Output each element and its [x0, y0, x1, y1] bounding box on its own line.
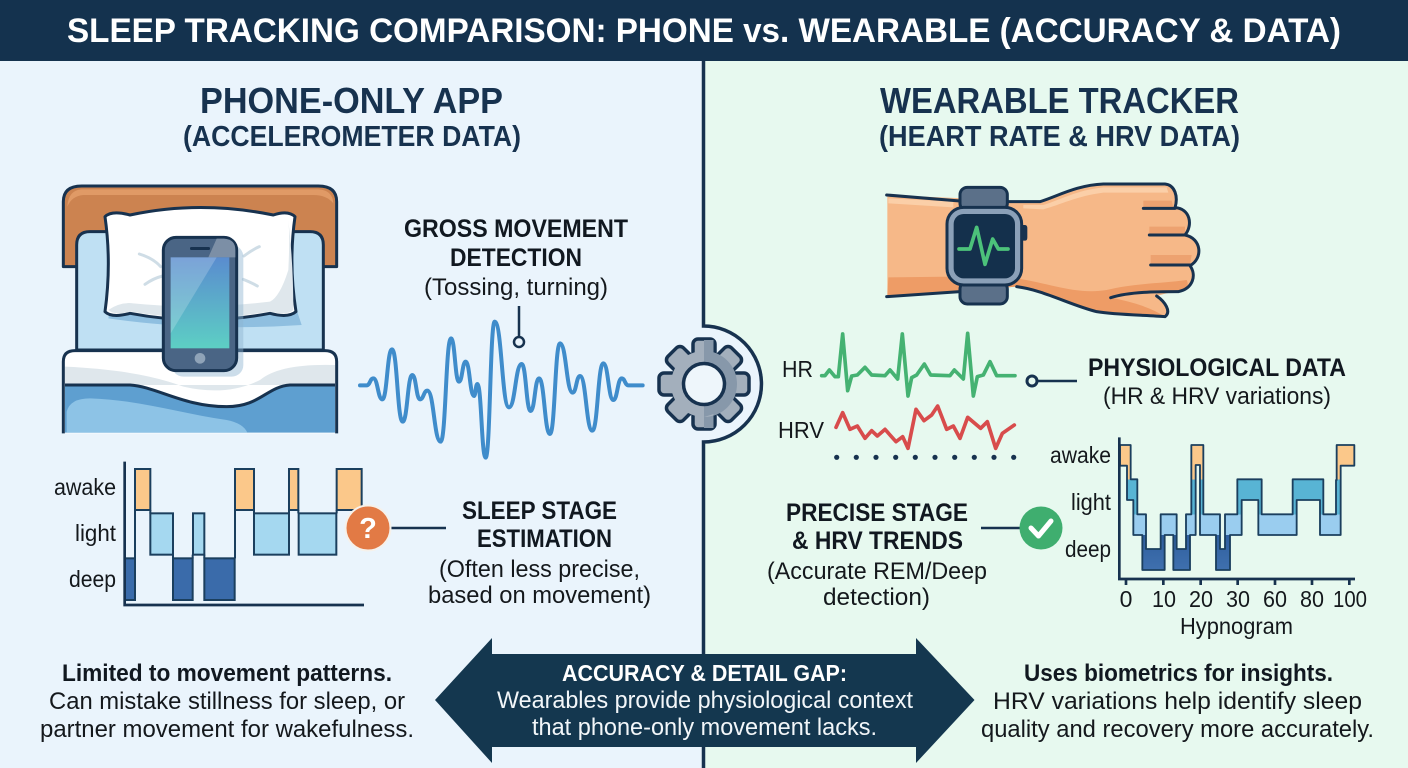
chart: accelerometer waveform: [360, 322, 643, 458]
chart: HR and HRV signals: [778, 333, 1016, 460]
heading: phone-only app: [183, 80, 521, 153]
callout: sleep stage estimation: (Often less precise,: [439, 556, 640, 583]
panel: wearable tracker: [767, 80, 1374, 743]
text block: wearable benefit: quality and recovery more accurately.: [981, 716, 1374, 743]
callout: gross movement detection: [404, 215, 628, 301]
icon: wrist with smartwatch: [887, 184, 1199, 317]
icon: center gear: [659, 339, 749, 429]
callout: sleep stage estimation: [428, 497, 651, 609]
callout: precise stage and HRV trends: & HRV TRENDS: [792, 527, 963, 555]
heading: wearable tracker: (HEART RATE & HRV DATA): [879, 121, 1240, 153]
label: HR: HR: [782, 356, 813, 382]
callout: physiological data: PHYSIOLOGICAL DATA: [1088, 354, 1346, 382]
text block: phone limitation: Can mistake stillness for sleep, or: [49, 688, 405, 715]
panel: phone-only app: [40, 80, 651, 743]
icon: check mark badge: [981, 506, 1062, 550]
line: HR trace: [822, 333, 1015, 396]
callout arrow: accuracy and detail gap: [435, 638, 974, 763]
label: HRV: HRV: [778, 417, 825, 443]
panel background: wearable side: [704, 61, 1408, 768]
leader line: physiological data: [1027, 376, 1077, 386]
callout: sleep stage estimation: SLEEP STAGE: [462, 497, 617, 525]
callout arrow: accuracy and detail gap: ACCURACY & DETAIL GAP:: [562, 660, 847, 686]
callout: gross movement detection: DETECTION: [450, 244, 582, 272]
dots: time axis: [834, 455, 1016, 460]
text block: wearable benefit: [981, 660, 1374, 743]
icon: question mark badge: [346, 506, 446, 550]
title banner: SLEEP TRACKING COMPARISON: PHONE vs. WEARABLE (ACCURACY & DATA): [67, 12, 1341, 50]
step bars: [125, 462, 364, 605]
axis tick labels: [1120, 586, 1367, 612]
callout: precise stage and HRV trends: [767, 499, 987, 611]
text block: wearable benefit: Uses biometrics for insights.: [1024, 660, 1333, 687]
axis tick labels: 80: [1300, 586, 1324, 612]
text block: wearable benefit: HRV variations help identify sleep: [993, 688, 1362, 715]
axis tick labels: 20: [1189, 586, 1213, 612]
callout: physiological data: [1088, 354, 1346, 410]
chart: phone sleep stages: [54, 462, 364, 605]
panel background: phone side: [0, 61, 704, 768]
icon: phone on bed: [63, 186, 337, 433]
line: HRV trace: [836, 406, 1014, 448]
axis tick labels: 10: [1152, 586, 1176, 612]
text block: phone limitation: [40, 660, 414, 743]
center divider: [704, 61, 761, 768]
heading: wearable tracker: [879, 80, 1240, 153]
text block: phone limitation: partner movement for wakefulness.: [40, 716, 414, 743]
axis tick labels: 30: [1226, 586, 1250, 612]
stage labels: deep: [1065, 536, 1111, 562]
callout: precise stage and HRV trends: PRECISE STAGE: [786, 499, 968, 527]
stage labels: light: [75, 520, 117, 546]
callout: precise stage and HRV trends: (Accurate REM/Deep: [767, 558, 987, 585]
stage labels: awake: [1050, 442, 1111, 468]
callout: precise stage and HRV trends: detection): [823, 584, 930, 611]
callout arrow: accuracy and detail gap: that phone-only movement lacks.: [532, 714, 877, 741]
stage labels: deep: [69, 566, 116, 592]
text block: phone limitation: Limited to movement patterns.: [62, 660, 392, 687]
heading: phone-only app: (ACCELEROMETER DATA): [183, 121, 521, 153]
chart: hypnogram: [1050, 437, 1367, 639]
stage labels: [1050, 442, 1112, 562]
axis tick labels: 60: [1263, 586, 1287, 612]
title banner: [0, 0, 1408, 61]
heading: wearable tracker: WEARABLE TRACKER: [880, 80, 1239, 121]
leader line: movement: [514, 306, 524, 347]
axis tick labels: 0: [1120, 586, 1132, 612]
axis tick labels: 100: [1333, 586, 1367, 612]
callout: gross movement detection: GROSS MOVEMENT: [404, 215, 628, 243]
heading: phone-only app: PHONE-ONLY APP: [200, 80, 503, 121]
callout arrow: accuracy and detail gap: Wearables provide physiological context: [497, 687, 913, 714]
stage labels: [54, 474, 117, 592]
callout: gross movement detection: (Tossing, turning): [424, 274, 608, 301]
step ribbon and axes: [1119, 437, 1355, 585]
callout: sleep stage estimation: ESTIMATION: [477, 525, 612, 553]
callout: sleep stage estimation: based on movement): [428, 582, 651, 609]
axis title: Hypnogram: [1180, 613, 1293, 639]
callout: physiological data: (HR & HRV variations): [1103, 383, 1331, 410]
stage labels: awake: [54, 474, 116, 500]
icon: question mark badge: ?: [359, 513, 377, 545]
stage labels: light: [1071, 489, 1112, 515]
